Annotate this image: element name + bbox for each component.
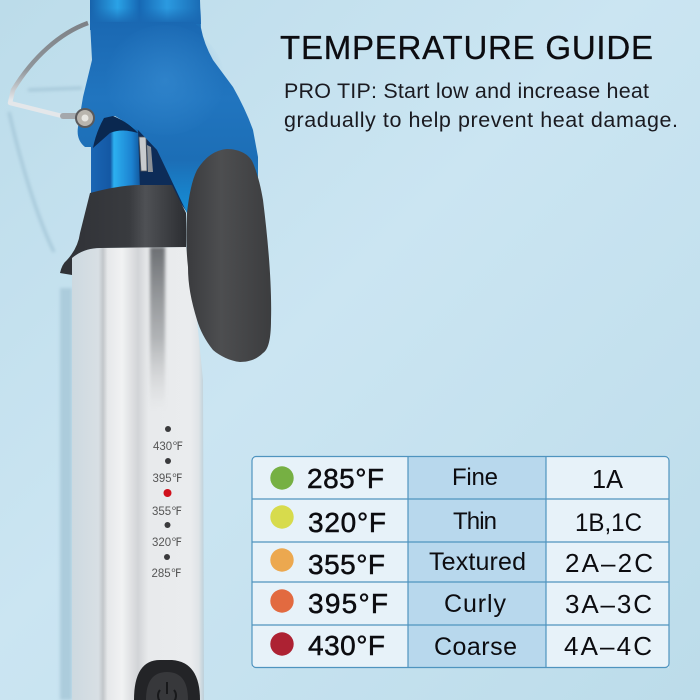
pro tip text [284,79,678,132]
blue handle body [78,22,258,216]
icon: curling iron [9,0,271,700]
row: 430°F: 4A–4C [564,631,652,661]
power button [134,660,200,700]
row: 285°F [270,463,624,494]
clip rivet [60,109,94,127]
row: 320°F [270,505,642,538]
label 320: 320℉ [152,537,182,549]
pro tip text: PRO TIP: Start low and increase heat [284,79,649,103]
blue neck [91,120,141,194]
table left column [252,456,408,668]
pro tip text: gradually to help prevent heat damage. [284,108,678,132]
table middle column [408,456,546,668]
row: 395°F: 3A–3C [565,589,652,619]
row: 395°F: Curly [444,590,506,618]
clip wire shadow [9,88,82,252]
table border [252,456,669,668]
row: 395°F: 395°F [308,588,388,619]
panel: temperature table [252,456,669,668]
row: 355°F: Textured [429,548,526,576]
label 285: 285℉ [152,568,182,580]
black collar [60,185,186,275]
row: 395°F [270,588,652,619]
metal pins [139,137,153,172]
handle sheen [105,25,225,135]
handle dark lever [93,116,138,148]
row: 355°F: 355°F [308,549,385,580]
row: 285°F: 1A [592,464,624,494]
title: TEMPERATURE GUIDE [280,29,653,66]
label 355: 355℉ [152,506,182,518]
clip wire [10,23,88,116]
row: 320°F: Thin [453,508,497,535]
label 395: 395℉ [152,473,183,485]
row: 355°F: 2A–2C [565,548,653,578]
row: 320°F: 320°F [308,507,386,538]
row: 285°F: Fine [452,464,498,491]
row: 430°F [270,630,652,661]
paddle grip [186,149,271,362]
row: 355°F [270,548,653,580]
label 430: 430℉ [153,441,183,453]
blue handle top [90,0,201,30]
row: 430°F: 430°F [308,630,385,661]
silver barrel [72,247,204,700]
table right column [546,456,669,668]
temperature indicator [152,426,183,580]
barrel shadow [60,288,72,700]
barrel dark streak [150,247,165,410]
row: 430°F: Coarse [434,633,517,661]
row: 285°F: 285°F [307,463,384,494]
dark gap behind handle [138,128,188,214]
table grid [252,456,669,667]
handle top fade [90,8,201,24]
row: 320°F: 1B,1C [575,509,642,537]
